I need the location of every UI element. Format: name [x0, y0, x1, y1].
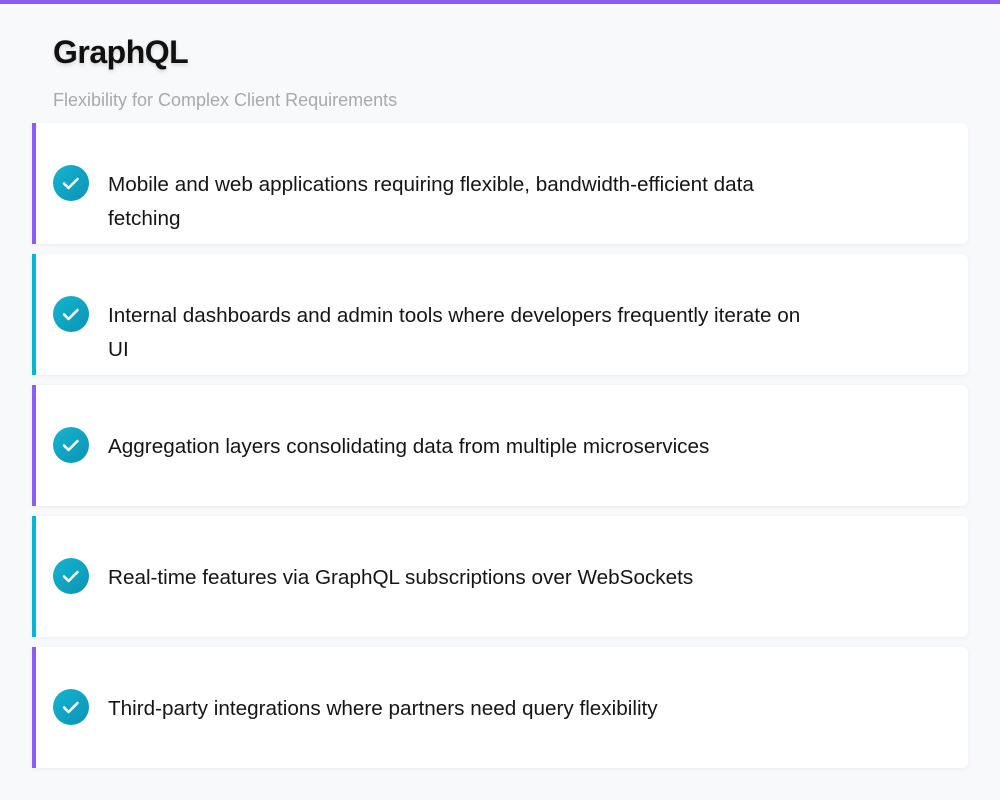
- icon: check: [53, 296, 89, 332]
- title: GraphQL: [53, 34, 188, 70]
- card 2: [32, 254, 968, 375]
- text: Third-party integrations where partners need query flexibility: [108, 697, 658, 720]
- text: Aggregation layers consolidating data from multiple microservices: [108, 435, 709, 458]
- text: Real-time features via GraphQL subscriptions over WebSockets: [108, 566, 693, 589]
- icon: check: [53, 427, 89, 463]
- icon: check: [53, 689, 89, 725]
- card 5: [32, 647, 968, 768]
- text: Mobile and web applications requiring flexible, bandwidth-efficient data fetching: [108, 173, 754, 230]
- card 4: [32, 516, 968, 637]
- icon: check: [53, 558, 89, 594]
- icon: check: [53, 165, 89, 201]
- card 1: [32, 123, 968, 244]
- card 3: [32, 385, 968, 506]
- text: Internal dashboards and admin tools where developers frequently iterate on UI: [108, 304, 800, 361]
- subtitle: Flexibility for Complex Client Requirements: [53, 90, 397, 110]
